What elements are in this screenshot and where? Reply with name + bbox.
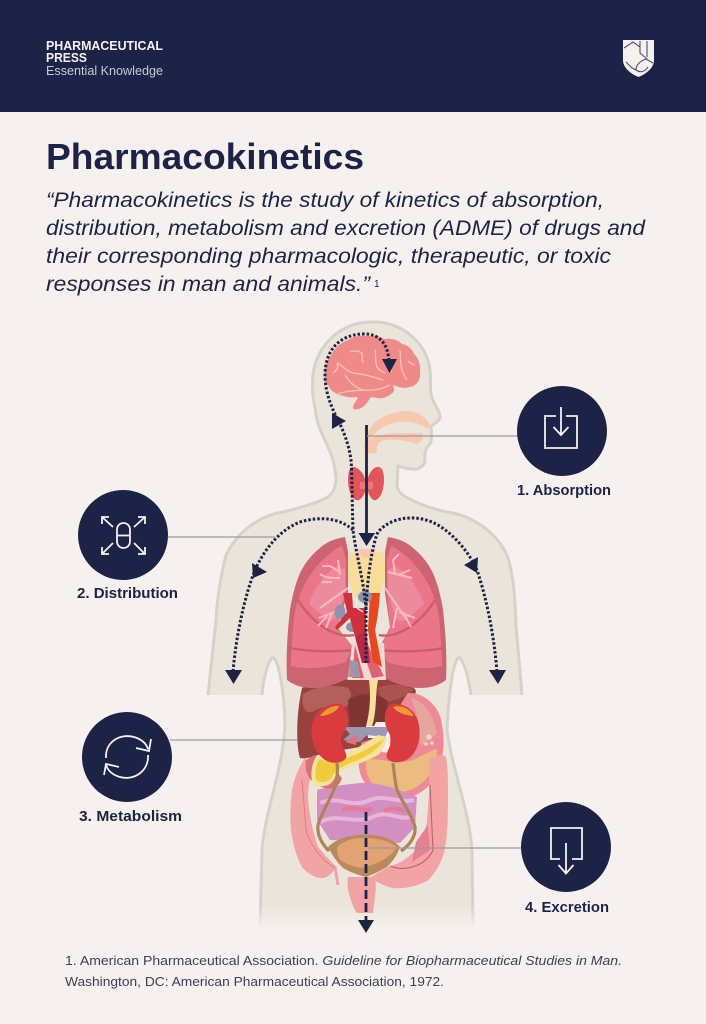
organ: ureters bbox=[318, 763, 415, 851]
arrow: oral absorption bbox=[358, 425, 375, 546]
body silhouette bbox=[208, 322, 522, 930]
left lung bbox=[287, 537, 354, 688]
organ: lungs bbox=[287, 537, 446, 688]
organ: bladder bbox=[328, 835, 400, 877]
callout: absorption bbox=[367, 386, 611, 499]
organ: liver bbox=[297, 679, 416, 758]
publisher wordmark: Essential Knowledge bbox=[46, 64, 163, 78]
organ: nasal passage bbox=[364, 411, 430, 454]
icon: absorption arrow into box bbox=[545, 407, 577, 448]
publisher wordmark: PRESS bbox=[46, 51, 87, 65]
callout: excretion: 4. Excretion bbox=[525, 900, 609, 916]
definition quote: “Pharmacokinetics is the study of kinetics of absorption, bbox=[46, 188, 604, 212]
organ: small intestine bbox=[317, 783, 417, 843]
organ: kidneys bbox=[312, 704, 420, 763]
body diagram bbox=[208, 322, 522, 933]
organ: renal vessels bbox=[343, 722, 390, 753]
organ: pancreas bbox=[311, 735, 387, 786]
organ: stomach bbox=[359, 693, 444, 800]
header band bbox=[0, 0, 706, 112]
organ: rectum bbox=[348, 877, 376, 913]
arrow: distribution to brain bbox=[325, 334, 397, 663]
callout: excretion bbox=[368, 802, 611, 916]
right lung bbox=[379, 537, 446, 688]
callout: absorption: 1. Absorption bbox=[517, 483, 611, 499]
callout: metabolism bbox=[79, 712, 297, 825]
footnote reference: Washington, DC: American Pharmaceutical Association, 1972. bbox=[65, 974, 444, 989]
definition quote: distribution, metabolism and excretion (ADME) of drugs and bbox=[46, 216, 646, 240]
organ: large intestine bbox=[291, 756, 447, 887]
organ: gallbladder duct bbox=[366, 680, 378, 726]
title: Pharmacokinetics bbox=[46, 136, 364, 177]
arrow: distribution to left arm bbox=[225, 519, 353, 684]
icon: capsule with outward arrows bbox=[102, 517, 145, 554]
definition quote: their corresponding pharmacologic, therapeutic, or toxic bbox=[46, 244, 611, 268]
definition quote: responses in man and animals.” bbox=[46, 272, 371, 296]
icon: shield logo bbox=[623, 40, 654, 77]
organ: brain bbox=[324, 336, 420, 409]
organ: thyroid bbox=[348, 467, 384, 500]
definition quote bbox=[46, 188, 646, 296]
publisher wordmark bbox=[46, 39, 163, 78]
publisher wordmark: PHARMACEUTICAL bbox=[46, 39, 163, 53]
callout: metabolism: 3. Metabolism bbox=[79, 809, 182, 825]
arrow: excretion dashed bbox=[358, 812, 374, 933]
callout: distribution: 2. Distribution bbox=[77, 586, 178, 602]
organ: great vessels bbox=[348, 643, 386, 680]
callout: distribution bbox=[77, 490, 275, 602]
organ: thymus and airway bbox=[348, 549, 385, 597]
organ: heart and aorta bbox=[334, 591, 382, 667]
arrow: distribution to right arm bbox=[366, 518, 506, 684]
footnote reference: 1. American Pharmaceutical Association. Guideline for Biopharmaceutical Studies in Man. bbox=[65, 953, 622, 968]
icon: circular arrows bbox=[104, 736, 151, 778]
icon: arrow out of box bbox=[551, 828, 582, 874]
definition quote: 1 bbox=[374, 279, 380, 290]
organ: duodenum bbox=[306, 755, 342, 788]
footnote reference bbox=[65, 953, 622, 989]
